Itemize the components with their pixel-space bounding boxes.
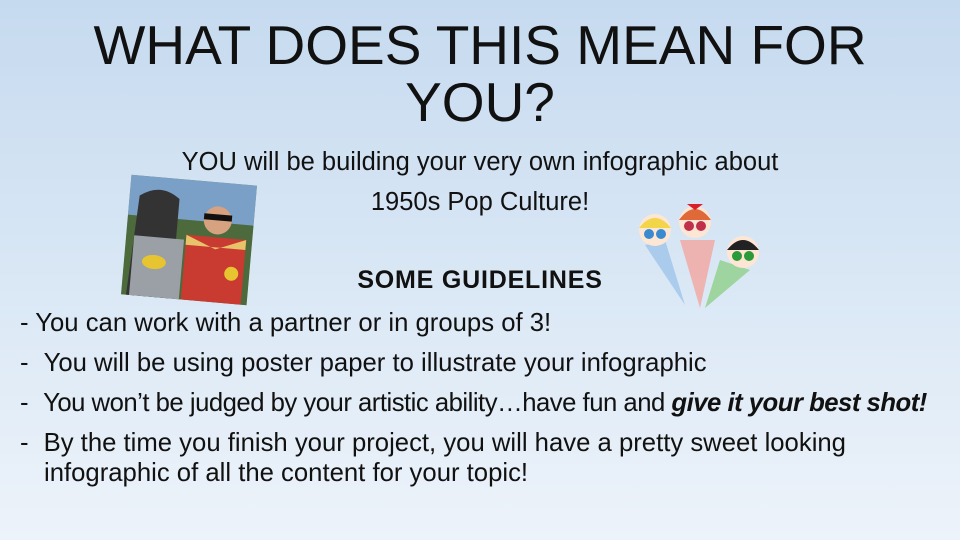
guidelines list: infographic of all the content for your topic! xyxy=(44,459,528,487)
intro text: 1950s Pop Culture! xyxy=(371,188,589,216)
guidelines list: - You won’t be judged by your artistic ability…have fun and give it your best shot! xyxy=(20,389,927,417)
intro text xyxy=(182,148,778,216)
intro text: YOU will be building your very own infographic about xyxy=(182,148,778,176)
guidelines list xyxy=(20,309,927,487)
guidelines list: - By the time you finish your project, you will have a pretty sweet looking xyxy=(20,429,846,457)
title: YOU? xyxy=(405,71,555,133)
title xyxy=(93,14,867,133)
guidelines list: - You will be using poster paper to illustrate your infographic xyxy=(20,349,707,377)
image: batman and robin xyxy=(121,175,257,305)
image: powerpuff girls xyxy=(639,204,759,308)
title: WHAT DOES THIS MEAN FOR xyxy=(93,14,867,76)
heading: some guidelines: SOME GUIDELINES xyxy=(357,266,603,294)
guidelines list: - You can work with a partner or in groups of 3! xyxy=(20,309,551,337)
